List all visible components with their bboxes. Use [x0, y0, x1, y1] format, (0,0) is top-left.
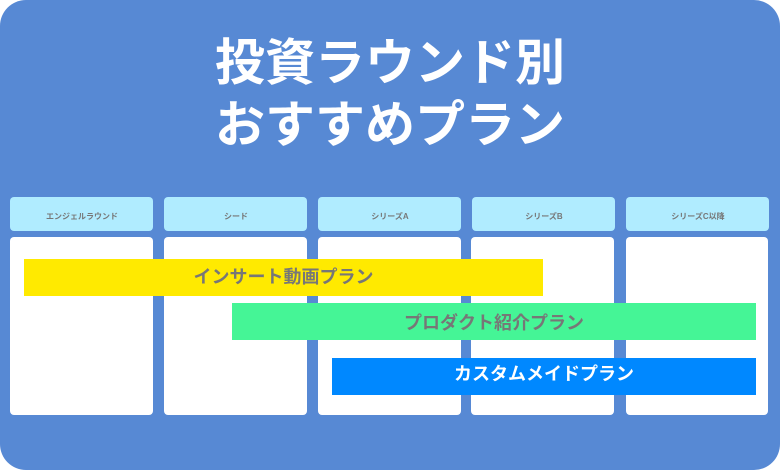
column: シリーズC以降	[626, 237, 768, 415]
header: シリーズC以降: シリーズC以降	[671, 212, 725, 221]
bar: インサート動画プラン	[24, 259, 543, 296]
column: シリーズA	[318, 237, 460, 415]
column: エンジェルラウンド	[10, 237, 152, 415]
bar: カスタムメイドプラン	[332, 358, 756, 395]
header: シリーズA: シリーズA	[371, 212, 409, 221]
header: シリーズB: シリーズB	[525, 212, 563, 221]
header: シード	[164, 197, 307, 231]
header: エンジェルラウンド: エンジェルラウンド	[46, 212, 118, 221]
column: シード	[164, 237, 306, 415]
header: シリーズA	[318, 197, 461, 231]
bar: プロダクト紹介プラン: プロダクト紹介プラン	[404, 313, 584, 333]
header: エンジェルラウンド	[10, 197, 153, 231]
bar: プロダクト紹介プラン	[232, 303, 756, 340]
title: 投資ラウンド別	[215, 35, 565, 91]
title	[215, 35, 565, 153]
column: シリーズB	[471, 237, 614, 415]
bar: インサート動画プラン: インサート動画プラン	[194, 267, 374, 287]
title: おすすめプラン	[215, 97, 565, 153]
header: シード: シード	[224, 212, 248, 221]
header: シリーズB	[472, 197, 615, 231]
header: シリーズC以降	[626, 197, 769, 231]
bar: カスタムメイドプラン: カスタムメイドプラン	[454, 364, 634, 384]
